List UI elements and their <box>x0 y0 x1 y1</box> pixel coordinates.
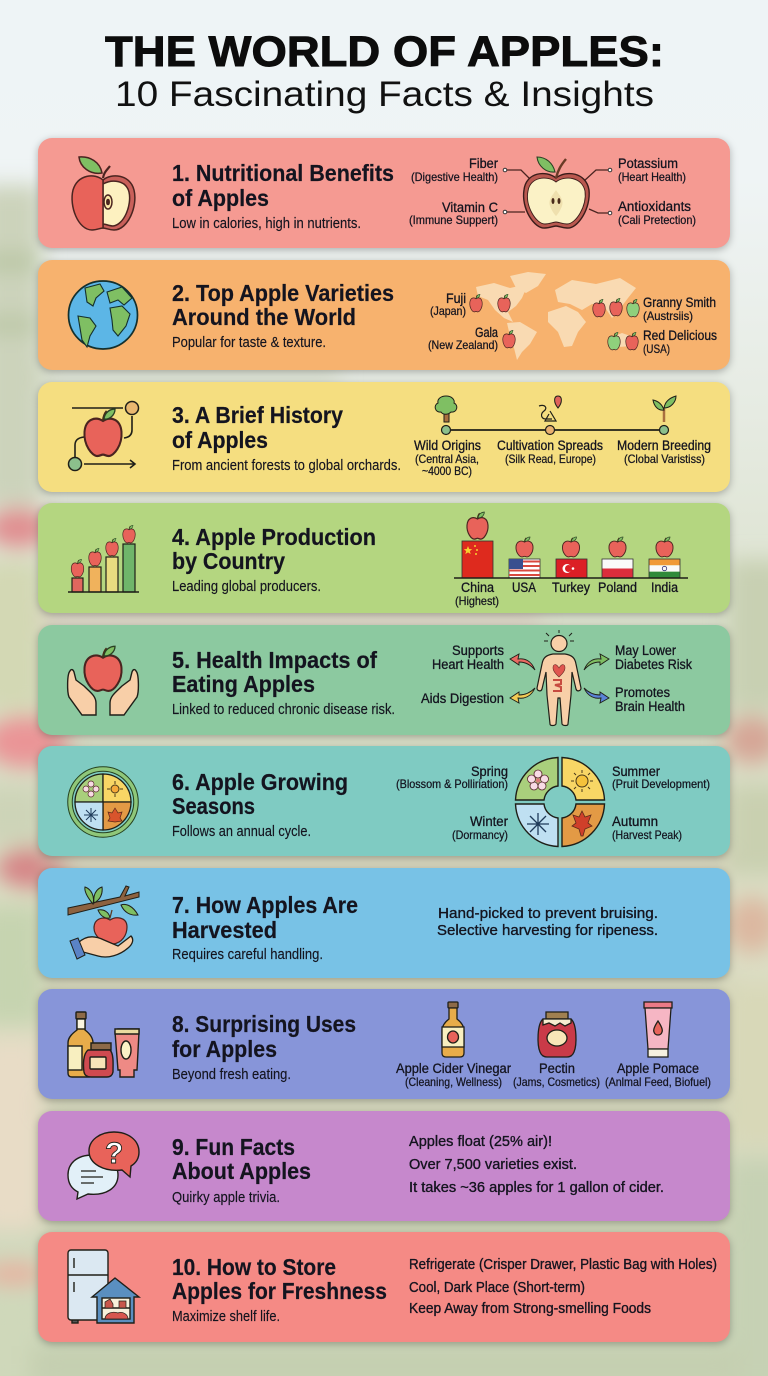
icon: hand picking apple <box>68 886 139 959</box>
labels: health impacts: Aids Digestion <box>421 691 504 706</box>
panel: 10 storage <box>38 1232 730 1342</box>
text block: facts: It takes ~36 apples for 1 gallon of cider. <box>409 1179 664 1196</box>
heading <box>172 1134 311 1184</box>
heading: for Apples <box>172 1036 277 1062</box>
labels: health impacts: Diabetes Risk <box>615 657 692 672</box>
icon: globe <box>68 281 138 349</box>
panel: 2 varieties <box>38 260 730 370</box>
icon: speech bubbles <box>68 1132 139 1199</box>
panel: 4 production <box>38 503 730 613</box>
labels: varieties: Red Delicious <box>643 328 717 343</box>
labels: countries <box>455 580 678 608</box>
flag bar chart <box>454 512 688 578</box>
panel: 9 fun facts <box>38 1111 730 1221</box>
subtitle: Popular for taste & texture. <box>172 335 326 351</box>
labels: varieties: (Japan) <box>430 304 466 318</box>
labels: health impacts: Supports <box>452 643 504 658</box>
heading <box>172 769 348 819</box>
labels: countries: Poland <box>598 580 637 595</box>
panel: 5 health <box>38 625 730 735</box>
labels: countries: (Highest) <box>455 594 499 608</box>
labels: uses: (Cleaning, Wellness) <box>405 1075 502 1089</box>
heading <box>172 280 394 330</box>
timeline <box>435 396 676 434</box>
subtitle: Leading global producers. <box>172 579 321 595</box>
labels: nutrients: (Cali Pretection) <box>618 213 696 227</box>
labels: varieties: (Austrsiis) <box>643 309 693 323</box>
icon: halved apple <box>72 157 135 230</box>
panel: 6 seasons <box>38 746 730 856</box>
labels: countries: USA <box>512 580 536 595</box>
heading <box>172 647 377 697</box>
text block: storage tips: Keep Away from Strong-smelling Foods <box>409 1300 651 1317</box>
panel: 7 harvest <box>38 868 730 978</box>
labels: countries: Turkey <box>552 580 590 595</box>
text block: harvest notes: Hand-picked to prevent bruising. <box>438 905 658 922</box>
heading: About Apples <box>172 1158 311 1184</box>
heading <box>172 402 343 453</box>
text block: facts <box>409 1133 664 1196</box>
icon: fridge and pantry <box>68 1250 139 1323</box>
subtitle: Low in calories, high in nutrients. <box>172 216 361 232</box>
subtitle: From ancient forests to global orchards. <box>172 458 401 474</box>
subtitle: Quirky apple trivia. <box>172 1190 280 1206</box>
title <box>105 28 664 114</box>
labels: timeline: Cultivation Spreads <box>497 438 603 453</box>
labels: health impacts <box>421 643 692 714</box>
panel: 8 uses <box>38 989 730 1099</box>
heading: Harvested <box>172 917 277 943</box>
title: THE WORLD OF APPLES: <box>105 28 664 76</box>
labels: seasons: Summer <box>612 764 660 779</box>
labels: uses <box>396 1061 711 1089</box>
labels: seasons: Autumn <box>612 814 658 829</box>
heading: 1. Nutritional Benefits <box>172 160 394 186</box>
labels: timeline: (Central Asia, <box>415 452 479 466</box>
heading: 4. Apple Production <box>172 524 376 550</box>
heading: 9. Fun Facts <box>172 1134 295 1160</box>
labels: health impacts: Heart Health <box>432 657 504 672</box>
labels: nutrients <box>409 156 696 227</box>
subtitle: Follows an annual cycle. <box>172 824 311 840</box>
heading: Seasons <box>172 793 255 819</box>
heading: 5. Health Impacts of <box>172 647 377 673</box>
labels: nutrients: Antioxidants <box>618 199 691 214</box>
heading: 6. Apple Growing <box>172 769 348 795</box>
icon: hands holding apple <box>68 646 138 715</box>
labels: timeline: Wild Origins <box>414 438 481 453</box>
icon: apple timeline <box>68 402 138 470</box>
heading: Around the World <box>172 304 356 330</box>
heading: 10. How to Store <box>172 1254 336 1280</box>
heading: Eating Apples <box>172 671 315 697</box>
labels: timeline: Modern Breeding <box>617 438 711 453</box>
labels: seasons: Winter <box>470 814 508 829</box>
labels: seasons: (Dormancy) <box>452 828 508 842</box>
icon: season cycle <box>70 769 136 835</box>
labels: timeline <box>414 438 711 478</box>
labels: nutrients: (Digestive Health) <box>411 170 498 184</box>
subtitle: Linked to reduced chronic disease risk. <box>172 702 395 718</box>
labels: seasons: (Pruit Development) <box>612 777 710 791</box>
text block: facts: Over 7,500 varieties exist. <box>409 1156 577 1173</box>
heading: of Apples <box>172 427 268 453</box>
labels: varieties <box>428 291 717 356</box>
heading: 3. A Brief History <box>172 402 343 428</box>
labels: uses: Apple Cider Vinegar <box>396 1061 511 1076</box>
icon: bottle, jar and tube <box>68 1012 139 1077</box>
labels: uses: Apple Pomace <box>617 1061 699 1076</box>
body diagram with arrows <box>510 630 609 726</box>
labels: timeline: (Silk Read, Europe) <box>505 452 596 466</box>
labels: uses: (Anlmal Feed, Biofuel) <box>605 1075 711 1089</box>
labels: uses: Pectin <box>539 1061 575 1076</box>
text block: harvest notes: Selective harvesting for ripeness. <box>437 922 658 939</box>
heading <box>172 160 394 211</box>
text block: storage tips <box>409 1256 717 1317</box>
labels: varieties: (USA) <box>643 342 670 356</box>
labels: seasons <box>396 764 710 842</box>
labels: nutrients: Vitamin C <box>442 200 498 215</box>
labels: countries: India <box>651 580 678 595</box>
labels: health impacts: Brain Health <box>615 699 685 714</box>
labels: nutrients: (Heart Health) <box>618 170 686 184</box>
labels: nutrients: Potassium <box>618 156 678 171</box>
apple diagram <box>503 157 612 228</box>
world map with apples <box>470 272 639 360</box>
icon: bar chart with apples <box>68 525 139 592</box>
labels: varieties: (New Zealand) <box>428 338 498 352</box>
labels: countries: China <box>461 580 494 595</box>
subtitle: Maximize shelf life. <box>172 1309 280 1325</box>
title: 10 Fascinating Facts & Insights <box>115 75 654 114</box>
heading <box>172 1011 356 1062</box>
labels: uses: (Jams, Cosmetics) <box>513 1075 600 1089</box>
heading <box>172 1254 387 1304</box>
labels: varieties: Gala <box>475 325 498 340</box>
labels: timeline: (Clobal Varistiss) <box>624 452 705 466</box>
labels: seasons: (Harvest Peak) <box>612 828 682 842</box>
icon: speech bubbles: ? <box>105 1137 123 1170</box>
text block: storage tips: Refrigerate (Crisper Drawer, Plastic Bag with Holes) <box>409 1256 717 1273</box>
text block: storage tips: Cool, Dark Place (Short-term) <box>409 1279 585 1296</box>
text block: harvest notes <box>437 905 658 939</box>
subtitle: Requires careful handling. <box>172 947 323 963</box>
labels: seasons: (Blossom & Polliriation) <box>396 777 508 791</box>
labels: nutrients: Fiber <box>469 156 498 171</box>
labels: health impacts: Promotes <box>615 685 670 700</box>
panel: 3 history <box>38 382 730 492</box>
labels: timeline: ~4000 BC) <box>422 464 472 478</box>
heading <box>172 524 376 574</box>
season wheel <box>516 758 604 846</box>
heading: of Apples <box>172 185 269 211</box>
labels: seasons: Spring <box>471 764 508 779</box>
labels: nutrients: (Immune Suppert) <box>409 213 498 227</box>
heading: 2. Top Apple Varieties <box>172 280 394 306</box>
heading <box>172 892 358 943</box>
use icons <box>442 1002 672 1057</box>
labels: varieties: Granny Smith <box>643 295 716 310</box>
heading: 8. Surprising Uses <box>172 1011 356 1037</box>
heading: 7. How Apples Are <box>172 892 358 918</box>
subtitle: Beyond fresh eating. <box>172 1067 291 1083</box>
labels: varieties: Fuji <box>446 291 466 306</box>
heading: by Country <box>172 548 285 574</box>
labels: health impacts: May Lower <box>615 643 676 658</box>
heading: Apples for Freshness <box>172 1278 387 1304</box>
panel: 1 nutritional benefits <box>38 138 730 248</box>
text block: facts: Apples float (25% air)! <box>409 1133 552 1150</box>
